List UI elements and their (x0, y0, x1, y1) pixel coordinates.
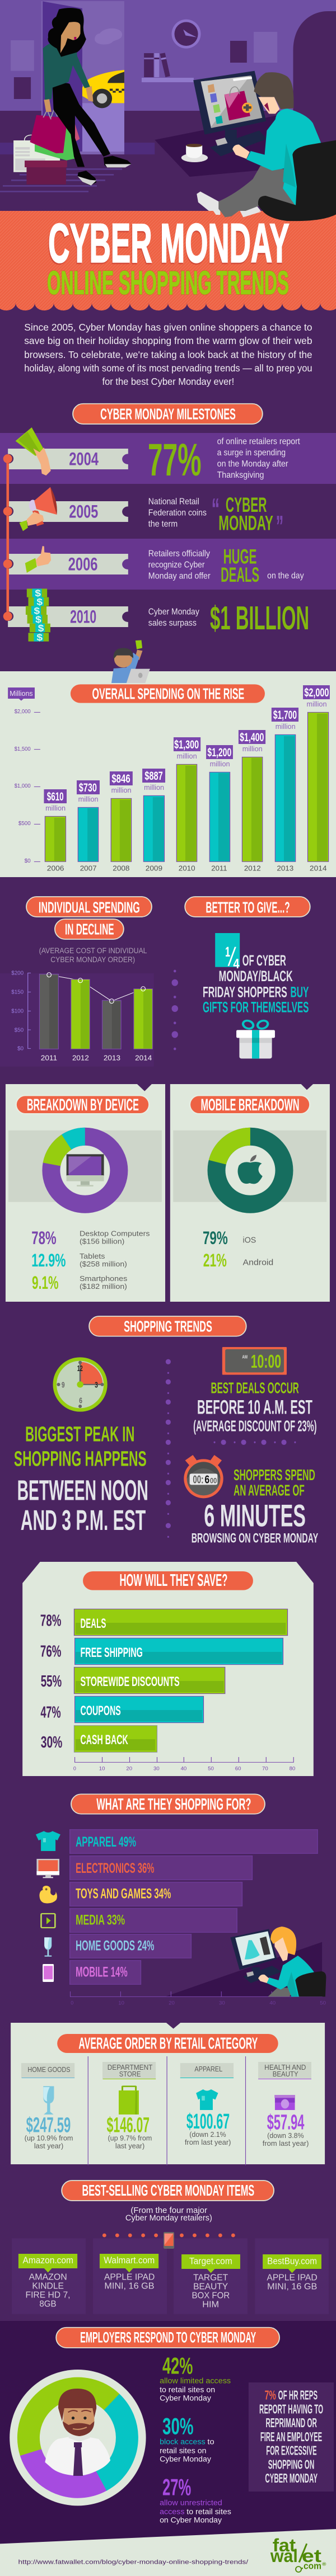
stat: 42 percent: allow limited access (160, 2377, 231, 2385)
heading: individual spending: INDIVIDUAL SPENDING (39, 900, 140, 916)
bar and line chart: 2011 (41, 1054, 57, 1062)
year tickets (8, 449, 128, 627)
year labels: 2014 (310, 865, 327, 872)
panel: best-selling items (12, 2232, 329, 2314)
item names: BOX FOR (192, 2290, 230, 2300)
milestone 2005 (148, 493, 283, 543)
percent labels (40, 1612, 62, 1751)
item names: HIM (202, 2299, 219, 2309)
peak text: AND 3 P.M. EST (21, 1504, 146, 1536)
heading: employers respond (56, 2328, 279, 2348)
device stats: 78% (31, 1228, 57, 1248)
years: 2006 (68, 554, 97, 574)
bar and line chart: $200 (11, 970, 24, 976)
best deals text (193, 1380, 317, 1435)
icon: wine glass (44, 1937, 52, 1957)
item names (26, 2272, 318, 2309)
axis: 10 (118, 2000, 124, 2006)
logo: fatwallet: ® (322, 2561, 326, 2567)
icon: stopwatch (184, 1455, 223, 1498)
heading: shopping trends: SHOPPING TRENDS (124, 1318, 212, 1335)
subtitle: CYBER MONDAY ORDER) (50, 955, 135, 964)
hero illustration (0, 0, 336, 221)
axis: $500 (18, 821, 31, 827)
logo: fatwallet: wal (270, 2546, 298, 2566)
year labels: 2007 (80, 865, 97, 872)
woman (43, 8, 131, 186)
logo: fatwallet: .com (301, 2560, 321, 2571)
milestone 2005: the term (148, 520, 178, 529)
milestone 2006: on the day (267, 571, 304, 581)
milestone 2005: Federation coins (148, 508, 207, 517)
year labels: 2012 (244, 865, 261, 872)
heading: how will they save (83, 1570, 253, 1590)
device stats: Smartphones (80, 1275, 127, 1283)
year labels: 2011 (211, 865, 227, 872)
years (68, 449, 99, 627)
device stats: ($258 million) (80, 1260, 127, 1269)
column: apparel (180, 2063, 234, 2147)
stat: 27 percent: allow unrestricted (160, 2499, 222, 2507)
logo: fatwallet: et (302, 2546, 322, 2566)
item names: BEAUTY (193, 2281, 228, 2291)
panel: breakdown by device: BREAKDOWN BY DEVICE (27, 1095, 139, 1114)
value labels: million (45, 804, 66, 812)
bar and line chart: 2014 (135, 1054, 152, 1062)
category labels (76, 1834, 171, 1980)
column: department store: DEPARTMENT (108, 2064, 153, 2071)
icon: digital clock: 10:00 (251, 1351, 281, 1372)
milestone 2004 (148, 434, 300, 486)
icon: hand with money (16, 427, 51, 475)
column: home goods: $247.59 (26, 2113, 71, 2137)
icon: wall clock noon to 3: 6 (79, 1397, 82, 1405)
item names: MINI, 16 GB (267, 2281, 317, 2291)
heading: overall spending (71, 684, 265, 703)
stat: 27 percent: to retail sites (186, 2508, 231, 2516)
panel: milestones (0, 427, 336, 671)
bar and line chart: $50 (15, 1027, 24, 1033)
bar and line chart: $100 (11, 1008, 24, 1014)
category labels: ELECTRONICS 36% (76, 1861, 155, 1876)
bar and line chart (0, 970, 154, 1067)
axis: $2,000 (15, 709, 31, 715)
heading: shopping trends (89, 1316, 246, 1336)
mobile stats: Android (243, 1259, 273, 1267)
illustration: woman shopping for clothes (230, 1927, 326, 1996)
retailer labels: Target.com (189, 2255, 232, 2266)
panel: average order by retail category (11, 2023, 325, 2222)
milestone 2006: Monday and offer (148, 572, 211, 581)
stat: 30 percent: Cyber Monday (160, 2455, 211, 2464)
icon: shirt (36, 1831, 60, 1851)
desk (155, 116, 287, 177)
axis: 40 (181, 1766, 187, 1772)
column: apparel: $100.67 (186, 2109, 230, 2133)
horizontal bars (74, 1609, 288, 1752)
coffee cup (181, 144, 208, 162)
milestone 2006: DEALS (221, 563, 259, 586)
value labels: million (111, 787, 132, 794)
clock (172, 20, 201, 49)
milestone 2004: a surge in spending (217, 448, 286, 458)
icon: money stacks: $ (38, 623, 44, 633)
milestone 2006: HUGE (223, 545, 256, 568)
axis: 0 (73, 1766, 76, 1772)
milestone 2010: Cyber Monday (148, 607, 199, 616)
value labels: $610 (47, 790, 64, 803)
callout: HR reps: 7% (265, 2388, 276, 2403)
stat: one quarter buy gifts for themselves: ¼ (225, 941, 239, 972)
column: department store: STORE (119, 2070, 141, 2078)
mobile stats: 79% (203, 1228, 228, 1248)
retailer labels: Walmart.com (104, 2255, 155, 2266)
bar and line chart: $0 (17, 1046, 24, 1052)
axis: 10 (99, 1766, 105, 1772)
icon: wall clock noon to 3: 3 (95, 1381, 98, 1390)
item names: FIRE HD 7, (26, 2290, 71, 2300)
column: home goods: last year) (34, 2142, 63, 2150)
horizontal bars: STOREWIDE DISCOUNTS (80, 1674, 180, 1689)
icon: desktop computer (67, 1154, 104, 1186)
milestone 2004: on the Monday after (217, 459, 288, 469)
column: department store: last year) (115, 2142, 144, 2150)
taxi (82, 70, 124, 108)
panel: shopping trends (14, 1347, 319, 1546)
icon: megaphone (19, 487, 57, 531)
axis: $0 (25, 858, 31, 864)
milestone 2006: Retailers officially (148, 549, 211, 558)
donut: device share (38, 1124, 132, 1217)
stat: 42 percent (160, 2352, 231, 2403)
icon: money stacks: $ (36, 597, 43, 607)
axis: 20 (126, 1766, 132, 1772)
value labels: $1,400 (240, 731, 264, 744)
icon: phone with dots (102, 2232, 235, 2249)
column: department store (102, 2062, 156, 2150)
device stats: Desktop Computers (80, 1230, 150, 1238)
item names: 8GB (39, 2299, 57, 2309)
item names: APPLE IPAD (267, 2272, 318, 2282)
milestone 2004: of online retailers report (217, 437, 300, 446)
icon: digital clock: AM (242, 1354, 248, 1360)
intro paragraph: for the best Cyber Monday ever! (102, 376, 234, 387)
panel: what are they shopping for (36, 1794, 326, 2006)
value labels: million (210, 760, 230, 768)
timeline (3, 454, 13, 621)
peak text (14, 1422, 148, 1536)
horizontal bars: DEALS (80, 1616, 106, 1631)
heading: what are they shopping for (71, 1794, 265, 1814)
bar and line chart: 2013 (104, 1054, 120, 1062)
shopping bags and box (13, 107, 80, 185)
axis: 40 (269, 2000, 276, 2006)
bar and line chart: $150 (11, 989, 24, 995)
value labels: $730 (79, 781, 97, 794)
icon: person with laptop (111, 640, 150, 683)
bars (45, 712, 329, 861)
axis (73, 1757, 296, 1772)
heading: average order (57, 2034, 278, 2053)
icon: stopwatch: 00 (210, 1477, 217, 1485)
icon: wall clock noon to 3: 9 (62, 1381, 65, 1390)
category labels: TOYS AND GAMES 34% (76, 1886, 171, 1901)
item names: TARGET (193, 2272, 228, 2282)
category bars (70, 1830, 318, 1984)
retailer labels: Amazon.com (23, 2255, 73, 2266)
man's legs over the band (213, 211, 336, 221)
horizontal bars: CASH BACK (80, 1732, 128, 1748)
icon: apple (238, 1155, 263, 1184)
column: health and beauty: (down 3.8% (267, 2132, 304, 2140)
percent labels: 78% (40, 1612, 61, 1630)
axis (8, 687, 40, 864)
axis: $1,000 (15, 783, 31, 789)
year labels (47, 865, 327, 872)
icon: media player (41, 1914, 55, 1928)
stat: 42 percent: 42% (162, 2352, 193, 2379)
item names: APPLE IPAD (104, 2272, 155, 2282)
horizontal bars: FREE SHIPPING (80, 1645, 143, 1660)
year labels: 2013 (277, 865, 293, 872)
axis: $1,500 (15, 746, 31, 752)
title (47, 213, 290, 301)
stat: one quarter buy gifts for themselves: BUY (290, 984, 309, 1001)
device stats: ($156 billion) (80, 1238, 124, 1246)
stat: one quarter buy gifts for themselves: OF CYBER (242, 953, 286, 969)
icon: money stacks: $ (36, 632, 43, 643)
stat: 30 percent: 30% (162, 2413, 194, 2440)
axis: Millions (10, 690, 33, 698)
milestone 2005: “ (212, 493, 220, 526)
stat: 30 percent: to (207, 2438, 214, 2446)
value labels: $1,300 (174, 738, 199, 751)
stat: 27 percent (160, 2474, 231, 2525)
percent labels: 47% (40, 1703, 61, 1721)
years: 2005 (69, 502, 98, 522)
milestone 2004: 77% (148, 434, 202, 486)
column: department store: (up 9.7% from (108, 2135, 152, 2142)
column: department store: $146.07 (107, 2113, 150, 2137)
floor stripes (0, 168, 122, 192)
stat: 42 percent: to retail sites on (160, 2386, 215, 2394)
axis: 50 (208, 1766, 214, 1772)
donut with man portrait (8, 2368, 147, 2507)
percent labels: 55% (41, 1672, 62, 1690)
year labels: 2010 (179, 865, 195, 872)
peak text: SHOPPING HAPPENS (14, 1447, 147, 1471)
horizontal bars: COUPONS (80, 1703, 121, 1718)
source url: http://www.fatwallet.com/blog/cyber-monday-online-shopping-trends/ (18, 2559, 249, 2565)
column: apparel: APPAREL (194, 2065, 223, 2073)
icon: money stacks (26, 588, 50, 643)
subtitle: Cyber Monday retailers) (125, 2214, 212, 2222)
milestone 2010: sales surpass (148, 619, 197, 628)
icon: money stacks: $ (35, 614, 41, 625)
axis: 20 (169, 2000, 175, 2006)
value labels: $846 (111, 772, 130, 785)
stat: 27 percent: on Cyber Monday (160, 2516, 222, 2525)
panel: mobile breakdown (170, 1084, 330, 1302)
axis: 60 (235, 1766, 241, 1772)
category labels: MOBILE 14% (76, 1964, 128, 1980)
six minutes text (192, 1467, 319, 1546)
mobile stats: 21% (203, 1251, 227, 1270)
man at computer (197, 72, 336, 221)
axis: 80 (290, 1766, 296, 1772)
stats (160, 2352, 334, 2525)
stat: 27 percent: 27% (162, 2474, 191, 2500)
item names: MINI, 16 GB (104, 2281, 155, 2291)
panel: how will they save (22, 1562, 314, 1776)
axis (71, 1991, 326, 2006)
device stats: Tablets (80, 1252, 105, 1261)
icon: monitor (36, 1859, 59, 1878)
icon: gift (236, 1019, 275, 1058)
year labels: 2006 (47, 865, 64, 872)
icon: rubber duck (39, 1886, 57, 1903)
column: health and beauty: from last year) (263, 2140, 309, 2148)
panel: employers respond (0, 2321, 336, 2576)
orange title band (0, 211, 336, 310)
logo: fatwallet: fat (273, 2536, 296, 2555)
value labels: $887 (144, 769, 163, 783)
callout: HR reps (249, 2382, 334, 2492)
milestone 2006: recognize Cyber (148, 561, 205, 569)
column: health and beauty: BEAUTY (273, 2070, 298, 2078)
computer monitor with shopping page (193, 71, 267, 156)
column: apparel: from last year) (185, 2139, 231, 2147)
stat: 27 percent: access (160, 2508, 184, 2516)
donut: mobile share (207, 1128, 293, 1213)
icon: money stacks: $ (35, 588, 41, 599)
mobile stats: iOS (243, 1236, 256, 1245)
category labels: APPAREL 49% (76, 1834, 136, 1850)
column: apparel: (down 2.1% (189, 2131, 226, 2139)
icon: digital clock (222, 1347, 287, 1375)
heading: individual spending: IN DECLINE (65, 921, 114, 938)
retailer labels: BestBuy.com (267, 2255, 317, 2266)
icon: wall clock noon to 3 (53, 1357, 108, 1412)
column: home goods: HOME GOODS (27, 2066, 71, 2074)
axis: 0 (71, 2000, 74, 2006)
icon: wall clock noon to 3: 12 (77, 1364, 83, 1373)
percent labels: 76% (40, 1642, 61, 1660)
axis: 50 (320, 2000, 326, 2006)
years: 2010 (70, 607, 96, 627)
value labels: $1,200 (207, 746, 231, 759)
axis: 70 (262, 1766, 268, 1772)
stat: one quarter buy gifts for themselves (203, 933, 309, 1016)
years: 2004 (69, 449, 99, 469)
value labels (44, 685, 330, 812)
logo: fatwallet (270, 2536, 326, 2572)
mobile stats (203, 1228, 273, 1270)
category labels: HOME GOODS 24% (76, 1938, 155, 1953)
heading: individual spending (26, 897, 152, 939)
bar and line chart: 2012 (72, 1054, 89, 1062)
heading: better to give (185, 897, 310, 917)
item names: KINDLE (32, 2281, 64, 2291)
icon: stopwatch: 6 (204, 1473, 209, 1486)
subtitle: (From the four major (130, 2206, 207, 2215)
milestone 2006 (148, 545, 304, 586)
column: home goods (21, 2063, 74, 2150)
percent labels: 30% (41, 1733, 62, 1751)
milestone 2005: CYBER (226, 493, 267, 516)
milestone 2010 (148, 600, 309, 637)
panel: individual spending in decline (0, 897, 310, 1067)
item names: AMAZON (29, 2272, 67, 2282)
stat: 30 percent: block access (160, 2438, 206, 2446)
value labels: million (242, 745, 263, 753)
column: health and beauty (258, 2062, 311, 2148)
year labels: 2008 (113, 865, 130, 872)
milestone 2005: MONDAY (218, 511, 273, 535)
subtitle (39, 946, 147, 964)
milestone 2004: Thanksgiving (217, 470, 264, 480)
device stats: 12.9% (31, 1251, 66, 1270)
device stats (31, 1228, 150, 1293)
panel: overall spending chart (0, 640, 336, 877)
milestone 2005: National Retail (148, 497, 199, 506)
device stats: ($182 million) (80, 1283, 127, 1291)
value labels: $1,700 (273, 708, 297, 722)
year labels: 2009 (146, 865, 162, 872)
value labels: million (307, 700, 327, 708)
value labels: million (276, 723, 296, 731)
stat: 30 percent: retail sites on (160, 2447, 206, 2455)
subtitle: (AVERAGE COST OF INDIVIDUAL (39, 946, 147, 955)
footer (0, 2529, 336, 2576)
heading: cyber monday milestones (73, 404, 263, 424)
value labels: million (78, 795, 99, 803)
panel: milestones: ” (276, 510, 283, 543)
icon: money stacks: $ (34, 605, 40, 616)
intro paragraph (24, 322, 312, 387)
peak text: BIGGEST PEAK IN (25, 1422, 134, 1446)
column: health and beauty: HEALTH AND (264, 2064, 306, 2071)
icon: stopwatch: 00: (193, 1473, 204, 1486)
heading: best-selling items (62, 2181, 274, 2201)
icon: mobile phone (43, 1964, 54, 1982)
axis: 30 (153, 1766, 160, 1772)
subtitle (125, 2206, 212, 2222)
shelf with books (142, 53, 194, 82)
icon: thumbs up (25, 546, 51, 573)
column: home goods: (up 10.9% from (25, 2135, 73, 2142)
stat: 42 percent: Cyber Monday (160, 2394, 211, 2403)
axis: 30 (219, 2000, 225, 2006)
panel: breakdown by device (6, 1084, 165, 1302)
panel: shopping trends: BETWEEN NOON (17, 1474, 148, 1506)
value labels: million (177, 752, 197, 760)
value labels: million (144, 784, 164, 792)
category labels: MEDIA 33% (76, 1912, 125, 1928)
stat: 30 percent (160, 2413, 214, 2464)
device stats: 9.1% (32, 1273, 58, 1293)
retailer labels (18, 2254, 321, 2273)
